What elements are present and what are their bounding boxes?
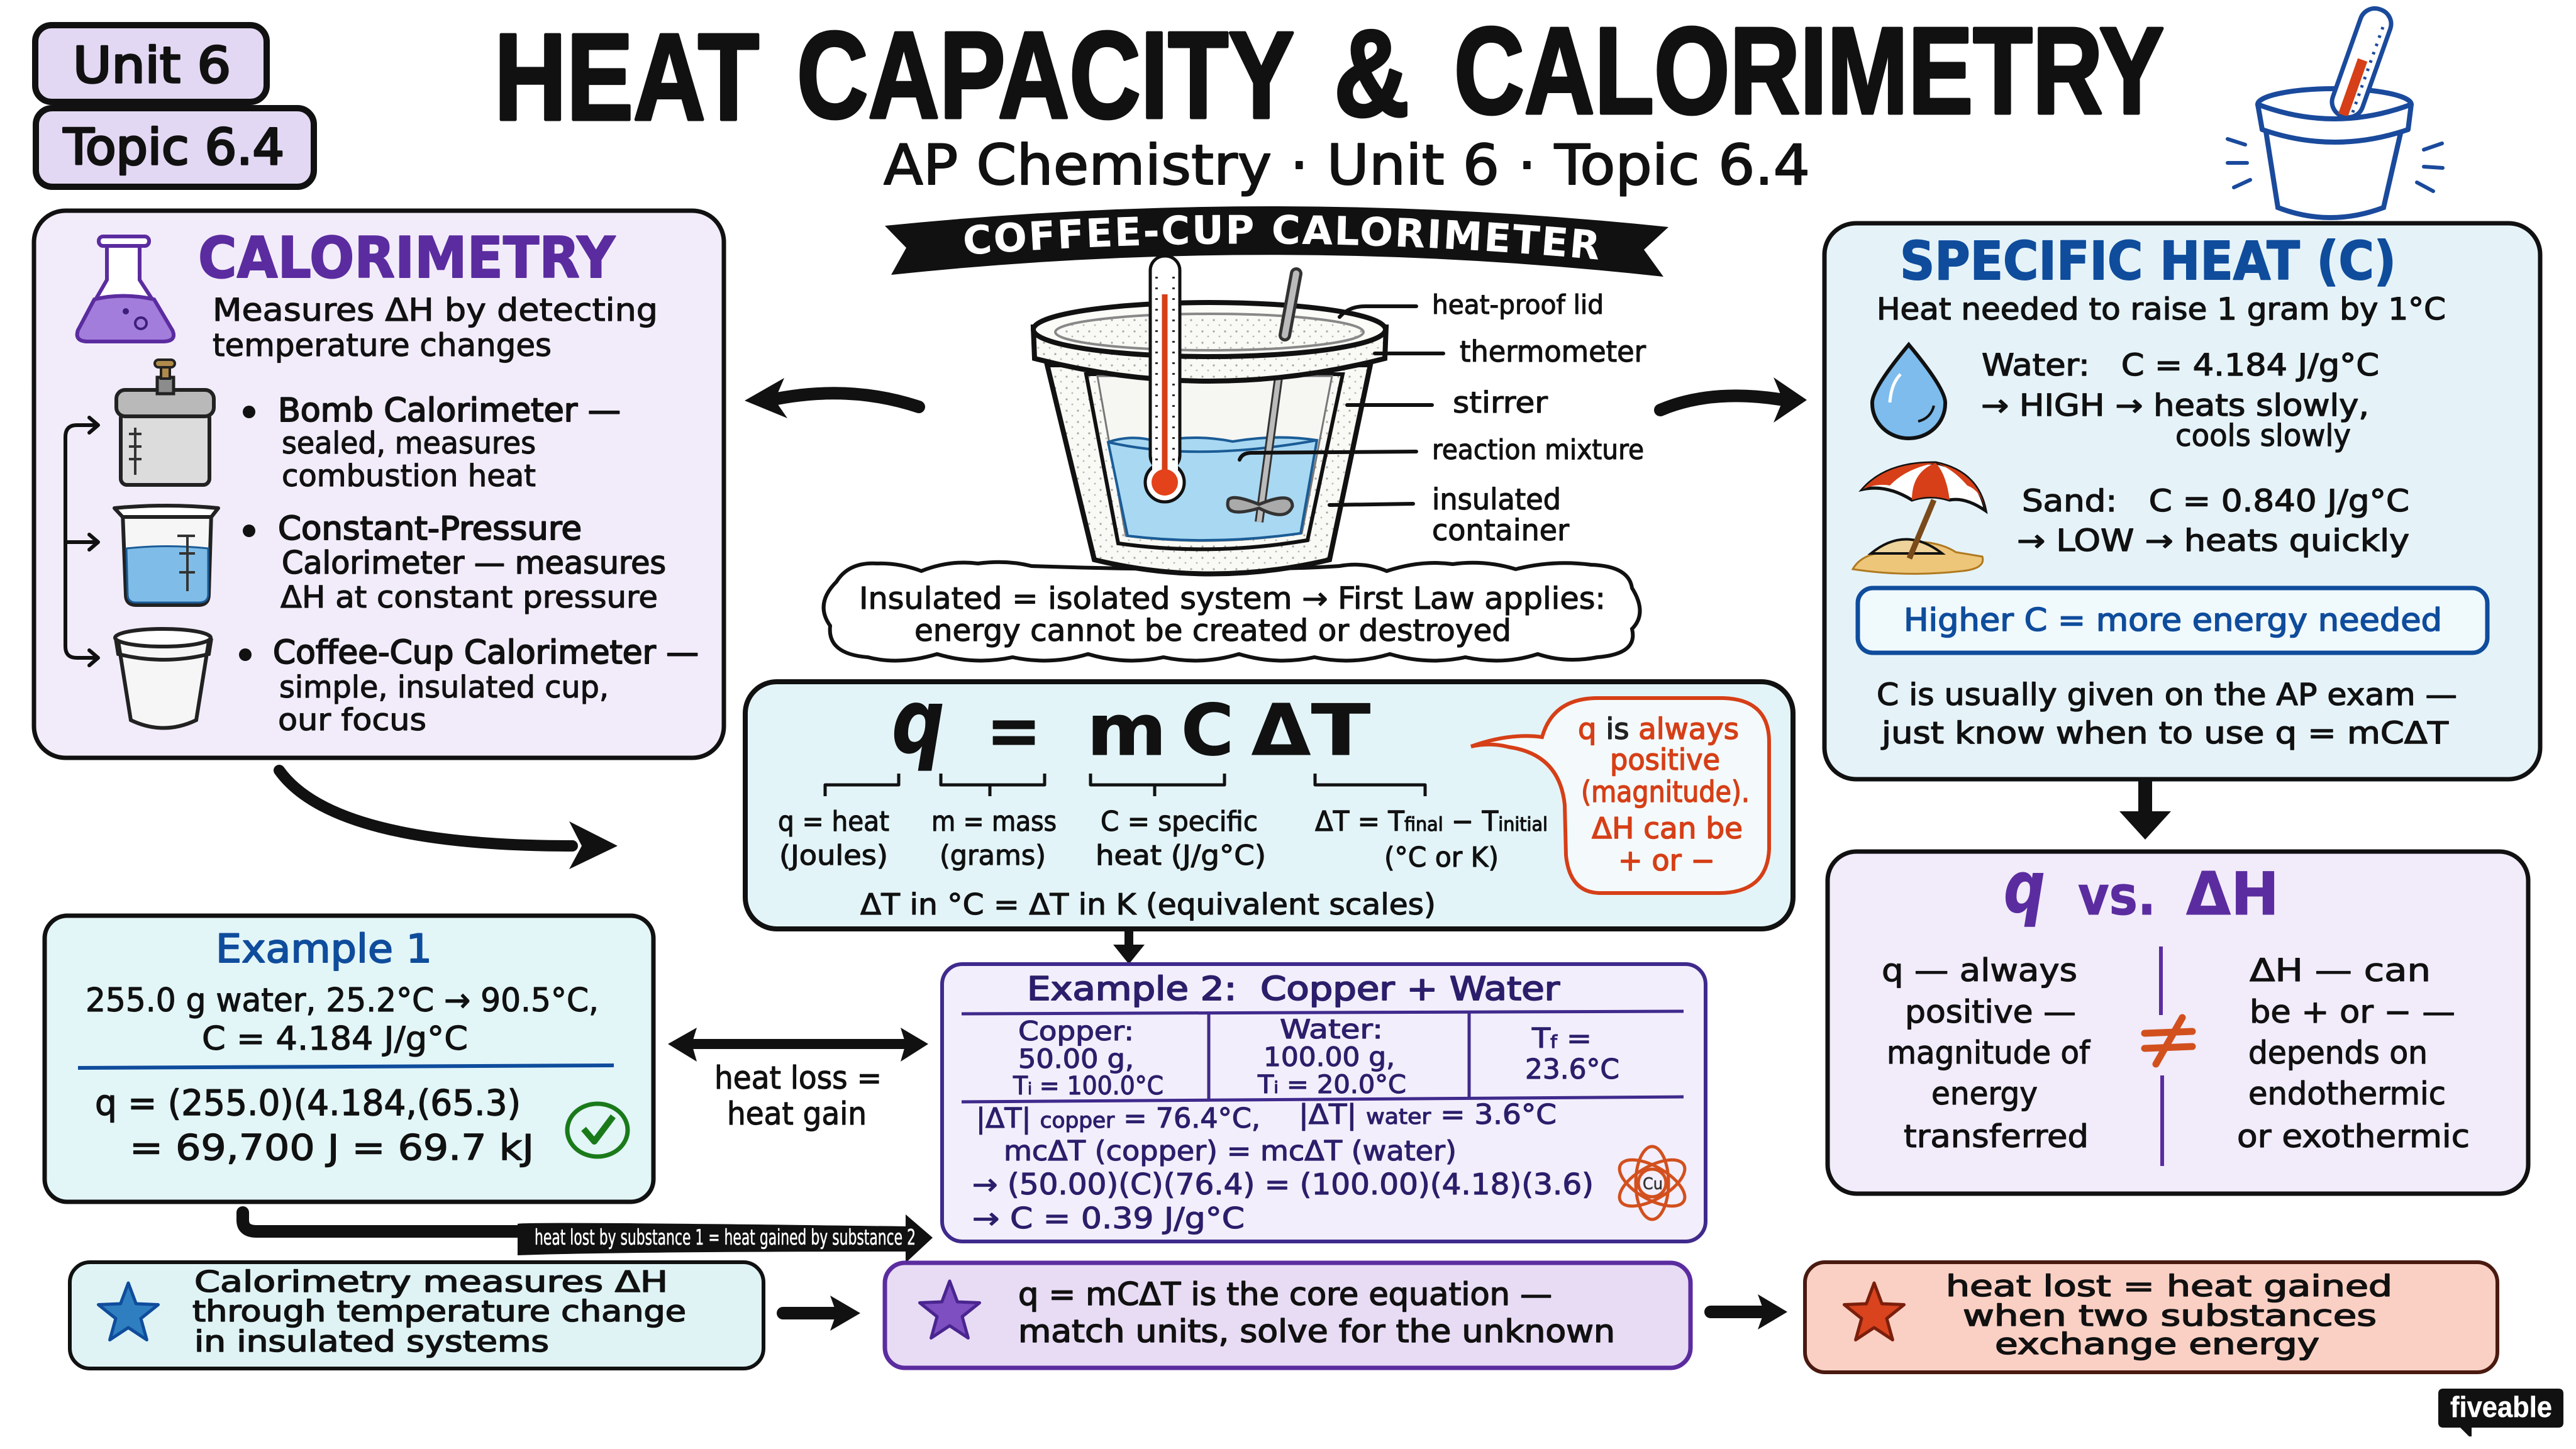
banner: coffee-cup calorimeter: COFFEE-CUP CALORIMETER xyxy=(965,214,1598,260)
text: solution steps: → (50.00)(C)(76.4) = (100.00)(4.18)(3.6) xyxy=(972,1167,1594,1201)
labels: thermometer xyxy=(1460,335,1646,369)
table: water xyxy=(1257,1014,1406,1099)
text: C definition: heat (J/g°C) xyxy=(1096,840,1266,872)
equation: q = mC delta T: = xyxy=(986,690,1041,772)
icon: not equal xyxy=(2145,1018,2192,1064)
text: sand: → LOW → heats quickly xyxy=(2017,523,2409,558)
equation: q = mC delta T: C xyxy=(1181,690,1234,772)
heading: example 1: Example 1 xyxy=(216,926,432,972)
text: delta T definition xyxy=(1315,806,1548,874)
text: q column: transferred xyxy=(1904,1118,2089,1155)
text: through temperature change xyxy=(192,1294,686,1328)
text: description xyxy=(213,292,658,364)
equation: q = mC delta T: m xyxy=(1087,690,1167,772)
labels: heat-proof lid xyxy=(1432,289,1604,320)
text: constant-pressure calorimeter: ΔH at constant pressure xyxy=(280,580,658,615)
equation: q = mC delta T: Δ xyxy=(1252,690,1311,772)
text xyxy=(192,1265,686,1358)
text: calculation xyxy=(95,1083,534,1169)
text: given values: C = 4.184 J/g°C xyxy=(202,1020,468,1058)
callout: q always positive: q is always xyxy=(1578,712,1739,746)
panel: example 2 xyxy=(942,964,1706,1241)
text xyxy=(1946,1269,2392,1361)
thermometer xyxy=(1145,256,1184,502)
text: scale note: ΔT in °C = ΔT in K (equivalent scales) xyxy=(860,887,1436,921)
text: q column xyxy=(1882,952,2090,1155)
divider xyxy=(2161,947,2162,1166)
brackets xyxy=(825,774,1425,796)
text: q = mCΔT is the core equation — xyxy=(1018,1276,1552,1313)
text: solution steps: |ΔT| water = 3.6°C xyxy=(1299,1099,1557,1131)
title xyxy=(494,2,2164,146)
text: C definition: C = specific xyxy=(1101,806,1258,838)
arrow: calorimetry to equation xyxy=(279,770,618,869)
text xyxy=(1018,1276,1615,1350)
text: constant-pressure calorimeter: Constant-Pressure xyxy=(278,510,582,548)
stirrer xyxy=(1228,377,1292,522)
text: solution steps: |ΔT| copper = 76.4°C, xyxy=(976,1102,1260,1135)
table: water: Ti = 20.0°C xyxy=(1257,1070,1406,1099)
text: constant-pressure calorimeter xyxy=(243,510,666,615)
callout: insulated system: Insulated = isolated system → First Law applies: xyxy=(859,581,1606,616)
text: heat loss = heat gain: heat gain xyxy=(727,1096,867,1132)
icon: water drop xyxy=(1872,345,1945,438)
text: sand xyxy=(2017,484,2409,558)
equation: q = mC delta T: T xyxy=(1311,690,1370,772)
text: exam note: C is usually given on the AP exam — xyxy=(1877,677,2457,713)
table lines xyxy=(962,1011,1684,1102)
icon: foam cup with thermometer xyxy=(2228,4,2443,218)
text: description: Measures ΔH by detecting xyxy=(213,292,658,328)
text: description: temperature changes xyxy=(213,327,552,364)
icon: bomb calorimeter xyxy=(116,360,214,485)
outer insulated cup xyxy=(1047,365,1370,574)
icon: copper atom xyxy=(1613,1146,1692,1219)
text: water: → HIGH → heats slowly, xyxy=(1981,388,2369,423)
text: delta H column: or exothermic xyxy=(2237,1118,2470,1155)
callout: higher C xyxy=(1858,588,2487,653)
table: final temperature xyxy=(1525,1023,1619,1085)
text: Calorimetry measures ΔH xyxy=(194,1265,668,1299)
text: C definition xyxy=(1096,806,1266,872)
text: constant-pressure calorimeter: Calorimeter — measures xyxy=(282,545,666,581)
subtitle: AP Chemistry · Unit 6 · Topic 6.4 xyxy=(884,133,1810,197)
logo: fiveable: fiveable xyxy=(2450,1391,2552,1423)
text: solution steps xyxy=(972,1099,1594,1235)
inner cup wall xyxy=(1086,374,1343,549)
diagram: coffee-cup calorimeter xyxy=(1033,256,1646,574)
text: exchange energy xyxy=(1995,1327,2319,1361)
heading: q vs delta H: ΔH xyxy=(2186,860,2279,929)
text: given values xyxy=(86,982,599,1058)
text: calculation: q = (255.0)(4.184,(65.3) xyxy=(95,1083,521,1124)
takeaway: calorimetry xyxy=(70,1262,763,1368)
callout: higher C: Higher C = more energy needed xyxy=(1904,602,2442,638)
equation: q = mC delta T: q xyxy=(892,671,945,774)
title: CALORIMETRY xyxy=(1454,2,2164,140)
callout: insulated system xyxy=(824,562,1640,660)
text: delta H column: depends on xyxy=(2248,1035,2428,1071)
banner arrow: heat lost equals heat gained: heat lost by substance 1 = heat gained by substance 2 xyxy=(535,1225,916,1250)
takeaway: core equation xyxy=(885,1263,1690,1368)
text: delta H column: ΔH — can xyxy=(2250,952,2431,989)
title: & xyxy=(1334,4,1409,142)
text: coffee-cup calorimeter: simple, insulated cup, xyxy=(279,670,609,705)
text: delta H column: endothermic xyxy=(2248,1075,2446,1112)
arrow: heat loss equals heat gain xyxy=(668,1028,928,1062)
takeaway: heat lost equals heat gained xyxy=(1805,1262,2497,1372)
heat-proof lid xyxy=(1033,303,1386,381)
text: when two substances xyxy=(1963,1299,2377,1333)
icon: check mark xyxy=(567,1104,628,1157)
callout: q always positive: (magnitude). xyxy=(1581,775,1750,809)
labels xyxy=(1432,289,1646,547)
heading: specific heat: SPECIFIC HEAT (C) xyxy=(1900,230,2396,292)
text: coffee-cup calorimeter xyxy=(239,634,699,738)
icon: blue star xyxy=(98,1283,158,1340)
text: match units, solve for the unknown xyxy=(1018,1313,1615,1350)
callout: q always positive: positive xyxy=(1610,743,1720,777)
text: delta T definition: ΔT = Tfinal − Tinitial xyxy=(1315,806,1548,838)
logo: fiveable xyxy=(2438,1389,2563,1436)
text: coffee-cup calorimeter: our focus xyxy=(278,702,426,738)
arrow: specific heat to q vs dH xyxy=(2119,780,2171,840)
heading: q vs delta H: vs. xyxy=(2078,865,2156,928)
badge: Topic 6.4 xyxy=(36,108,314,187)
arrow: takeaway 2 to 3 xyxy=(1711,1294,1787,1330)
table: final temperature: Tf = xyxy=(1531,1023,1592,1055)
panel: example 1 xyxy=(45,916,653,1202)
heading: calorimetry: CALORIMETRY xyxy=(198,225,616,291)
labels: reaction mixture xyxy=(1432,434,1644,466)
text: heat loss = heat gain xyxy=(714,1060,882,1132)
text: delta T definition: (°C or K) xyxy=(1384,841,1499,874)
text: given values: 255.0 g water, 25.2°C → 90.5°C, xyxy=(86,982,599,1019)
text: q definition xyxy=(778,806,889,872)
text: m definition: m = mass xyxy=(931,806,1057,838)
panel: equation xyxy=(745,671,1793,929)
badge: Unit 6 xyxy=(35,25,267,102)
text: calculation: = 69,700 J = 69.7 kJ xyxy=(130,1128,534,1169)
icon: coffee cup xyxy=(115,629,211,728)
stirrer shaft above lid xyxy=(1285,274,1296,335)
text: water: cools slowly xyxy=(2175,418,2351,453)
table: copper: 50.00 g, xyxy=(1018,1043,1134,1074)
text: in insulated systems xyxy=(194,1324,549,1358)
text: bomb calorimeter xyxy=(243,392,621,494)
badge: Topic 6.4: Topic 6.4 xyxy=(63,119,284,176)
text: delta H column: be + or − — xyxy=(2250,994,2455,1030)
labels: stirrer xyxy=(1453,386,1548,419)
heading: q vs delta H xyxy=(2004,847,2279,929)
title: CAPACITY xyxy=(797,6,1294,144)
arrow: diagram to specific heat xyxy=(1660,377,1807,423)
callout: q always positive: + or − xyxy=(1618,843,1715,877)
text: q column: energy xyxy=(1931,1075,2038,1112)
text: m definition xyxy=(931,806,1057,872)
callout: insulated system: energy cannot be created or destroyed xyxy=(914,613,1511,648)
text: sand: Sand: C = 0.840 J/g°C xyxy=(2022,484,2409,519)
text: q definition: (Joules) xyxy=(779,840,888,872)
heading: q vs delta H: q xyxy=(2004,847,2045,929)
text: bomb calorimeter: combustion heat xyxy=(282,458,536,494)
text: water xyxy=(1981,348,2379,453)
water xyxy=(1108,437,1317,540)
text: bomb calorimeter: sealed, measures xyxy=(282,426,536,461)
text: heat lost = heat gained xyxy=(1946,1269,2392,1303)
icon: red star xyxy=(1844,1283,1904,1340)
arrow: takeaway 1 to 2 xyxy=(783,1296,860,1331)
arrow: bracket to calorimeters xyxy=(65,418,98,665)
text: definition: Heat needed to raise 1 gram by 1°C xyxy=(1877,292,2446,327)
badge: Unit 6: Unit 6 xyxy=(73,38,231,94)
heading: example 2: Example 2: Copper + Water xyxy=(1027,970,1560,1008)
labels: container xyxy=(1432,513,1569,547)
text: water: Water: C = 4.184 J/g°C xyxy=(1982,348,2379,383)
text: solution steps: → C = 0.39 J/g°C xyxy=(972,1201,1245,1235)
icon: beaker xyxy=(114,506,218,605)
text: solution steps: mcΔT (copper) = mcΔT (water) xyxy=(1004,1135,1457,1167)
text: exam note: just know when to use q = mCΔT xyxy=(1881,716,2449,751)
callout: q always positive xyxy=(1471,698,1769,893)
text: exam note xyxy=(1877,677,2457,751)
arrow: example 1 to banner xyxy=(243,1213,528,1231)
table: copper: Copper: xyxy=(1018,1016,1134,1046)
text: bomb calorimeter: Bomb Calorimeter — xyxy=(278,392,621,430)
callout: q always positive: ΔH can be xyxy=(1592,811,1743,845)
label leaders xyxy=(1240,306,1443,505)
table: water: Water: xyxy=(1280,1014,1383,1045)
text: q column: q — always xyxy=(1882,952,2077,989)
text: q column: positive — xyxy=(1905,994,2076,1030)
panel: calorimetry xyxy=(34,211,724,758)
text: coffee-cup calorimeter: Coffee-Cup Calorimeter — xyxy=(273,634,699,672)
labels: insulated xyxy=(1432,482,1561,516)
text: heat loss = heat gain: heat loss = xyxy=(714,1060,882,1096)
inner cavity xyxy=(1097,376,1332,541)
text: delta H column xyxy=(2237,952,2470,1155)
text: m definition: (grams) xyxy=(940,840,1046,872)
arrow: diagram to calorimetry xyxy=(745,378,919,418)
icon: purple star xyxy=(919,1281,980,1338)
table: copper xyxy=(1013,1016,1163,1101)
text: q definition: q = heat xyxy=(778,806,889,838)
text: q column: magnitude of xyxy=(1887,1035,2090,1071)
table: water: 100.00 g, xyxy=(1263,1041,1395,1072)
table: final temperature: 23.6°C xyxy=(1525,1053,1619,1085)
equation: q = mC delta T xyxy=(892,671,1370,774)
icon: beach umbrella xyxy=(1853,463,1985,574)
panel: q vs delta H xyxy=(1828,847,2528,1194)
panel: specific heat xyxy=(1824,223,2540,779)
icon: flask xyxy=(77,236,174,341)
title: HEAT xyxy=(494,8,759,146)
table: copper: Ti = 100.0°C xyxy=(1013,1072,1163,1101)
banner arrow: heat lost equals heat gained xyxy=(518,1214,933,1263)
arrow: equation to example 2 xyxy=(1113,930,1145,964)
icon: copper atom: Cu xyxy=(1643,1175,1663,1194)
